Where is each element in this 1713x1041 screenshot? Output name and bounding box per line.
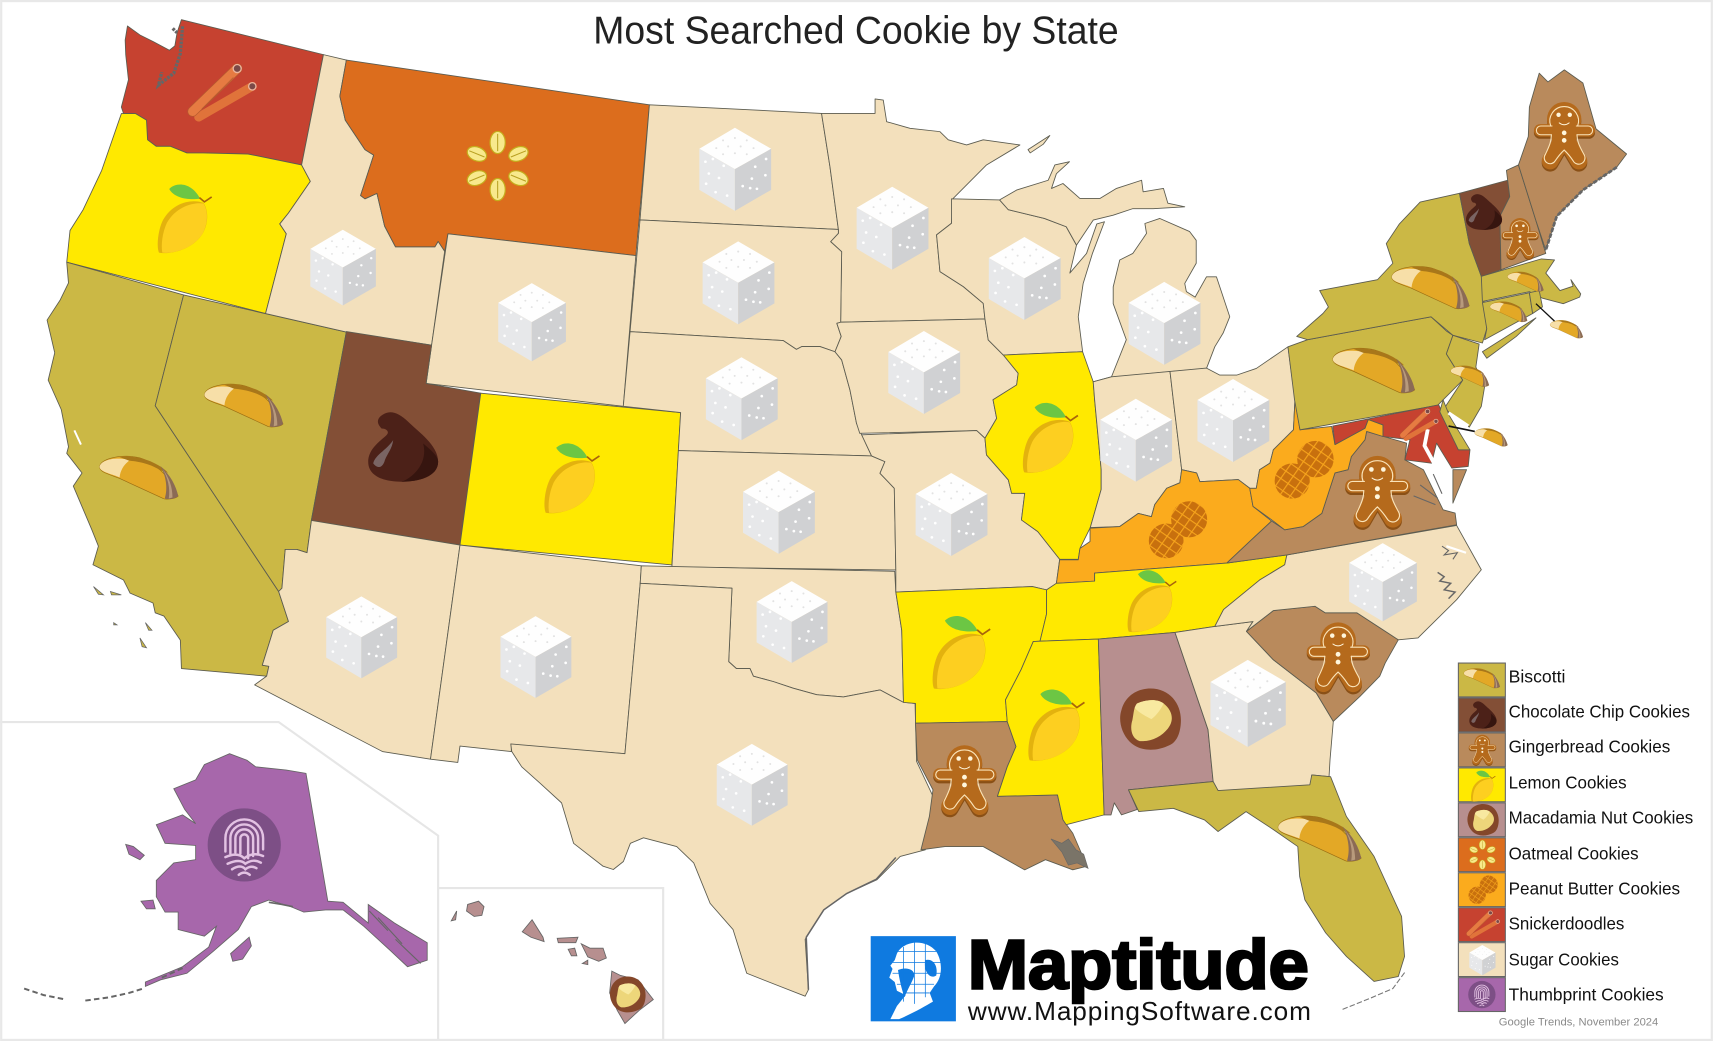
icon: lemon Mississippi	[1028, 690, 1084, 761]
North Carolina	[1215, 525, 1481, 640]
Michigan upper peninsula	[1000, 162, 1185, 245]
Montana	[340, 60, 649, 256]
Arizona	[255, 520, 460, 759]
icon: sugar cube Idaho	[310, 230, 376, 305]
Texas coast detail	[806, 857, 896, 990]
legend item: Gingerbread Cookies	[1458, 733, 1671, 767]
icon: cinnamon Maryland	[1403, 409, 1438, 438]
icon: thumbprint Alaska	[208, 808, 281, 882]
icon: gingerbread New Hampshire	[1503, 218, 1537, 256]
legend item: Macadamia Nut Cookies: Macadamia Nut Cookies	[1509, 808, 1693, 828]
icon: chocolate chip Vermont	[1466, 194, 1502, 230]
New Mexico	[430, 545, 641, 762]
icon: gingerbread Louisiana	[936, 745, 994, 810]
California	[47, 262, 288, 676]
icon: sugar cube Wyoming	[498, 283, 566, 361]
New Jersey	[1444, 335, 1485, 427]
Utah	[311, 332, 481, 545]
icon: peanut West Virginia	[1275, 441, 1334, 499]
icon: sugar cube Georgia	[1210, 660, 1286, 747]
Missouri	[862, 431, 1060, 592]
Massachusetts	[1481, 259, 1581, 304]
Chesapeake Bay	[1414, 429, 1450, 505]
Kansas	[672, 451, 896, 570]
South Carolina	[1246, 606, 1398, 721]
North Dakota	[640, 105, 838, 229]
Alaska	[24, 754, 427, 1001]
Florida keys detail	[1343, 972, 1405, 1009]
icon: macadamia Hawaii	[610, 977, 646, 1012]
icon: biscotti Massachusetts	[1508, 272, 1544, 292]
legend item: Snickerdoodles: Snickerdoodles	[1509, 914, 1625, 934]
Mississippi	[997, 639, 1104, 825]
legend item: Thumbprint Cookies	[1458, 978, 1664, 1012]
icon: oats Montana	[465, 131, 530, 201]
legend item: Sugar Cookies	[1458, 943, 1619, 977]
South Dakota	[630, 220, 842, 352]
Wisconsin	[937, 199, 1104, 355]
Maryland	[1333, 405, 1470, 468]
icon: biscotti California	[100, 456, 178, 499]
Oklahoma	[640, 566, 903, 702]
Nevada	[155, 295, 346, 592]
Ohio	[1170, 347, 1295, 488]
legend item: Peanut Butter Cookies: Peanut Butter Cookies	[1509, 879, 1680, 899]
Isle Royale	[1028, 135, 1050, 153]
Louisiana	[915, 722, 1087, 870]
legend item: Macadamia Nut Cookies	[1458, 803, 1693, 837]
Michigan lower peninsula	[1093, 218, 1230, 382]
logo wordmark: Maptitude	[968, 926, 1309, 1004]
icon: sugar cube Indiana	[1100, 399, 1172, 482]
icon: biscotti Connecticut	[1490, 302, 1527, 322]
legend item: Snickerdoodles	[1458, 908, 1625, 942]
icon: sugar cube Arizona	[326, 596, 397, 678]
icon: lemon Illinois	[1023, 403, 1078, 473]
icon: sugar cube Michigan	[1129, 282, 1200, 365]
Alabama	[1098, 632, 1213, 815]
New York	[1297, 193, 1487, 343]
West Virginia	[1250, 400, 1383, 530]
icon: gingerbread South Carolina	[1309, 622, 1367, 687]
icon: gingerbread Virginia	[1348, 456, 1408, 522]
Wyoming	[426, 234, 636, 406]
Florida	[1128, 775, 1405, 981]
icon: lemon Colorado	[544, 443, 599, 513]
logo mark: head and globe	[871, 936, 956, 1021]
New Hampshire	[1500, 165, 1546, 270]
icon: sugar cube Iowa	[888, 331, 960, 414]
icon: biscotti New York	[1392, 266, 1469, 309]
Maptitude logo	[871, 926, 1311, 1026]
legend item: Lemon Cookies: Lemon Cookies	[1509, 773, 1627, 793]
Minnesota	[822, 99, 1020, 322]
icon: sugar cube New Mexico	[500, 616, 571, 698]
Maine coast detail	[1546, 167, 1617, 250]
title: Most Searched Cookie by State	[593, 9, 1119, 53]
Delaware Bay	[1449, 413, 1468, 426]
legend item: Oatmeal Cookies: Oatmeal Cookies	[1509, 844, 1639, 864]
Iowa	[835, 319, 1018, 438]
Arkansas	[896, 587, 1047, 723]
icon: biscotti Delaware	[1475, 428, 1508, 446]
legend item: Lemon Cookies	[1458, 768, 1627, 802]
legend item: Biscotti	[1458, 663, 1565, 697]
icon: sugar cube Wisconsin	[989, 237, 1061, 320]
icon: sugar cube Oklahoma	[757, 581, 827, 663]
icon: sugar cube Nebraska	[706, 357, 778, 440]
North Carolina sounds	[1438, 546, 1466, 599]
Illinois	[985, 352, 1101, 559]
icon: macadamia Alabama	[1120, 689, 1181, 750]
icon: sugar cube Missouri	[916, 473, 987, 556]
Long Island	[1482, 318, 1536, 358]
Oregon	[67, 114, 310, 314]
legend item: Thumbprint Cookies: Thumbprint Cookies	[1509, 985, 1664, 1005]
inset frames	[0, 722, 663, 1041]
icon: sugar cube Minnesota	[857, 187, 928, 270]
Connecticut	[1482, 293, 1533, 340]
legend item: Biscotti: Biscotti	[1509, 667, 1565, 687]
Vermont	[1459, 180, 1510, 276]
icon: biscotti Nevada	[204, 384, 283, 427]
Louisiana delta detail	[1051, 839, 1088, 868]
legend item: Sugar Cookies: Sugar Cookies	[1509, 950, 1619, 970]
Delaware	[1440, 400, 1470, 450]
icon: lemon Oregon	[158, 185, 212, 253]
Idaho	[266, 55, 445, 345]
icon: gingerbread Maine	[1536, 102, 1593, 164]
icon: chocolate chip Utah	[368, 412, 438, 482]
icon: biscotti Rhode Island	[1550, 320, 1583, 338]
icon: lemon Arkansas	[933, 616, 990, 689]
legend item: Peanut Butter Cookies	[1458, 873, 1680, 907]
icon: sugar cube North Dakota	[699, 128, 771, 211]
icon: peanut Kentucky	[1149, 501, 1207, 558]
Tennessee	[1040, 555, 1287, 641]
legend item: Chocolate Chip Cookies: Chocolate Chip Cookies	[1509, 702, 1690, 722]
Puget Sound detail	[158, 26, 183, 85]
Colorado	[460, 393, 681, 565]
icon: cinnamon Washington	[193, 65, 256, 117]
California islands and bay	[74, 430, 152, 648]
icon: sugar cube Ohio	[1197, 379, 1269, 462]
icon: sugar cube Kansas	[743, 471, 815, 554]
Georgia	[1175, 622, 1333, 792]
logo URL: www.MappingSoftware.com	[967, 996, 1311, 1026]
Virginia eastern shore	[1453, 470, 1467, 503]
arrow: Delaware leader	[1449, 426, 1475, 431]
Washington	[121, 20, 323, 165]
Nebraska	[623, 332, 872, 456]
icon: sugar cube North Carolina	[1349, 543, 1417, 621]
Hawaii	[451, 901, 653, 1024]
icon: biscotti Pennsylvania	[1333, 348, 1415, 393]
legend	[1458, 663, 1693, 1012]
legend item: Oatmeal Cookies	[1458, 838, 1639, 872]
icon: sugar cube South Dakota	[703, 241, 774, 324]
icon: sugar cube Texas	[717, 744, 788, 826]
Kentucky	[1056, 470, 1272, 583]
Pennsylvania	[1288, 317, 1463, 430]
icon: biscotti New Jersey	[1451, 366, 1489, 387]
Virginia	[1227, 431, 1457, 563]
Texas	[511, 583, 933, 996]
legend item: Gingerbread Cookies: Gingerbread Cookies	[1509, 737, 1671, 757]
legend item: Chocolate Chip Cookies	[1458, 698, 1690, 732]
icon: lemon Tennessee	[1128, 570, 1176, 632]
Indiana	[1090, 371, 1182, 528]
icon: biscotti Florida	[1278, 816, 1361, 861]
source note: Google Trends, November 2024	[1499, 1017, 1659, 1029]
Maine	[1518, 70, 1627, 250]
arrow: Rhode Island leader	[1536, 304, 1555, 321]
Rhode Island	[1529, 291, 1542, 314]
